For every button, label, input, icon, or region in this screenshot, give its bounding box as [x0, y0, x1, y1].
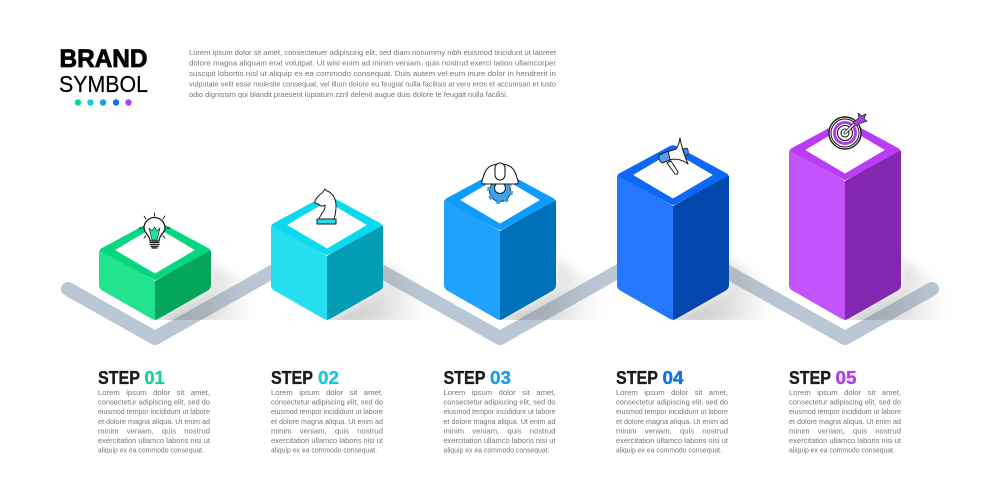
- step 1 text: exercitation ullamco laboris nisi ut: [98, 437, 210, 445]
- step 3 box: light blue: [444, 170, 556, 320]
- title: brand symbol: BRAND: [60, 45, 148, 73]
- step 4 text: 04: [662, 368, 684, 388]
- step 1 text: Lorem ipsum dolor sit amet,: [98, 389, 210, 397]
- step 5 text: [789, 368, 901, 455]
- icon: target with dart: [829, 113, 867, 149]
- step 2 text: minim veniam, quis nostrud: [271, 427, 383, 435]
- step 3 text: aliquip ex ea commodo consequat.: [444, 447, 550, 455]
- step 1 text: eiusmod tempor incididunt ut labore: [98, 408, 210, 416]
- icon: light bulb: [139, 213, 170, 248]
- title: brand symbol: SYMBOL: [59, 71, 148, 97]
- step 5 text: Lorem ipsum dolor sit amet,: [789, 389, 901, 397]
- step 5 text: consectetur adipiscing elit, sed do: [789, 399, 901, 407]
- icon: megaphone: [659, 138, 688, 174]
- zigzag path line: [68, 241, 932, 338]
- step 3 text: et dolore magna aliqua. Ut enim ad: [444, 418, 556, 426]
- intro text block: [189, 49, 557, 99]
- title: brand symbol: [59, 45, 148, 97]
- step 1 text: [98, 368, 210, 455]
- step 4 box: blue: [617, 145, 729, 320]
- box shadows: [156, 260, 932, 320]
- step 3 text: Lorem ipsum dolor sit amet,: [444, 389, 556, 397]
- step 1 text: STEP: [98, 368, 140, 388]
- step 2 box: cyan: [271, 195, 383, 320]
- step 2 text: Lorem ipsum dolor sit amet,: [271, 389, 383, 397]
- intro text block: suscipit lobortis nisl ut aliquip ex ea commodo consequat. Duis autem vel eum iriure dolor in hendrerit in: [189, 70, 556, 78]
- step 5 text: STEP: [789, 368, 831, 388]
- step 4 text: minim veniam, quis nostrud: [616, 427, 728, 435]
- step 3 text: [444, 368, 556, 455]
- intro text block: odio dignissim qui blandit praesent luptatum zzril delenit augue duis dolore te feugait nulla facilisi.: [189, 91, 508, 99]
- step 2 text: exercitation ullamco laboris nisi ut: [271, 437, 383, 445]
- step 4 text: consectetur adipiscing elit, sed do: [616, 399, 728, 407]
- step 5 text: aliquip ex ea commodo consequat.: [789, 447, 895, 455]
- step 3 text: minim veniam, quis nostrud: [444, 427, 556, 435]
- step 1 text: et dolore magna aliqua. Ut enim ad: [98, 418, 210, 426]
- step 1 text: consectetur adipiscing elit, sed do: [98, 399, 210, 407]
- step 5 box: purple: [789, 120, 901, 320]
- legend dots: [75, 99, 132, 106]
- step 4 text: aliquip ex ea commodo consequat.: [616, 447, 722, 455]
- step 4 text: exercitation ullamco laboris nisi ut: [616, 437, 728, 445]
- step 5 text: minim veniam, quis nostrud: [789, 427, 901, 435]
- step 1 text: 01: [144, 368, 164, 388]
- step 2 text: STEP: [271, 368, 313, 388]
- step 2 text: consectetur adipiscing elit, sed do: [271, 399, 383, 407]
- step 5 text: eiusmod tempor incididunt ut labore: [789, 408, 901, 416]
- step 4 text: eiusmod tempor incididunt ut labore: [616, 408, 728, 416]
- icon: chess knight: [315, 189, 336, 224]
- step 5 text: 05: [836, 368, 856, 388]
- step 5 text: et dolore magna aliqua. Ut enim ad: [789, 418, 901, 426]
- step 2 text: et dolore magna aliqua. Ut enim ad: [271, 418, 383, 426]
- step 4 text: Lorem ipsum dolor sit amet,: [616, 389, 728, 397]
- step 2 text: [271, 368, 383, 455]
- step 3 text: eiusmod tempor incididunt ut labore: [444, 408, 556, 416]
- step 2 text: aliquip ex ea commodo consequat.: [271, 447, 377, 455]
- step 4 text: STEP: [616, 368, 658, 388]
- step 5 text: exercitation ullamco laboris nisi ut: [789, 437, 901, 445]
- step 1 text: minim veniam, quis nostrud: [98, 427, 210, 435]
- step 3 text: STEP: [444, 368, 486, 388]
- icon: helmet and gear: [482, 163, 518, 202]
- intro text block: vulputate velit esse molestie consequat, vel illum dolore eu feugiat nulla facilisis at vero eros et accumsan et iusto: [189, 80, 556, 88]
- step 1 text: aliquip ex ea commodo consequat.: [98, 447, 204, 455]
- step 4 text: [616, 368, 728, 455]
- step 3 text: 03: [490, 368, 511, 388]
- intro text block: Lorem ipsum dolor sit amet, consectetuer adipiscing elit, sed diam nonummy nibh euismod tincidunt ut laoreet: [189, 49, 556, 57]
- step 3 text: exercitation ullamco laboris nisi ut: [444, 437, 556, 445]
- step 2 text: 02: [318, 368, 339, 388]
- step 1 box: green: [99, 220, 211, 320]
- intro text block: dolore magna aliquam erat volutpat. Ut wisi enim ad minim veniam, quis nostrud exerci tation ullamcorper: [189, 60, 557, 68]
- step 2 text: eiusmod tempor incididunt ut labore: [271, 408, 383, 416]
- step 3 text: consectetur adipiscing elit, sed do: [444, 399, 556, 407]
- step 4 text: et dolore magna aliqua. Ut enim ad: [616, 418, 728, 426]
